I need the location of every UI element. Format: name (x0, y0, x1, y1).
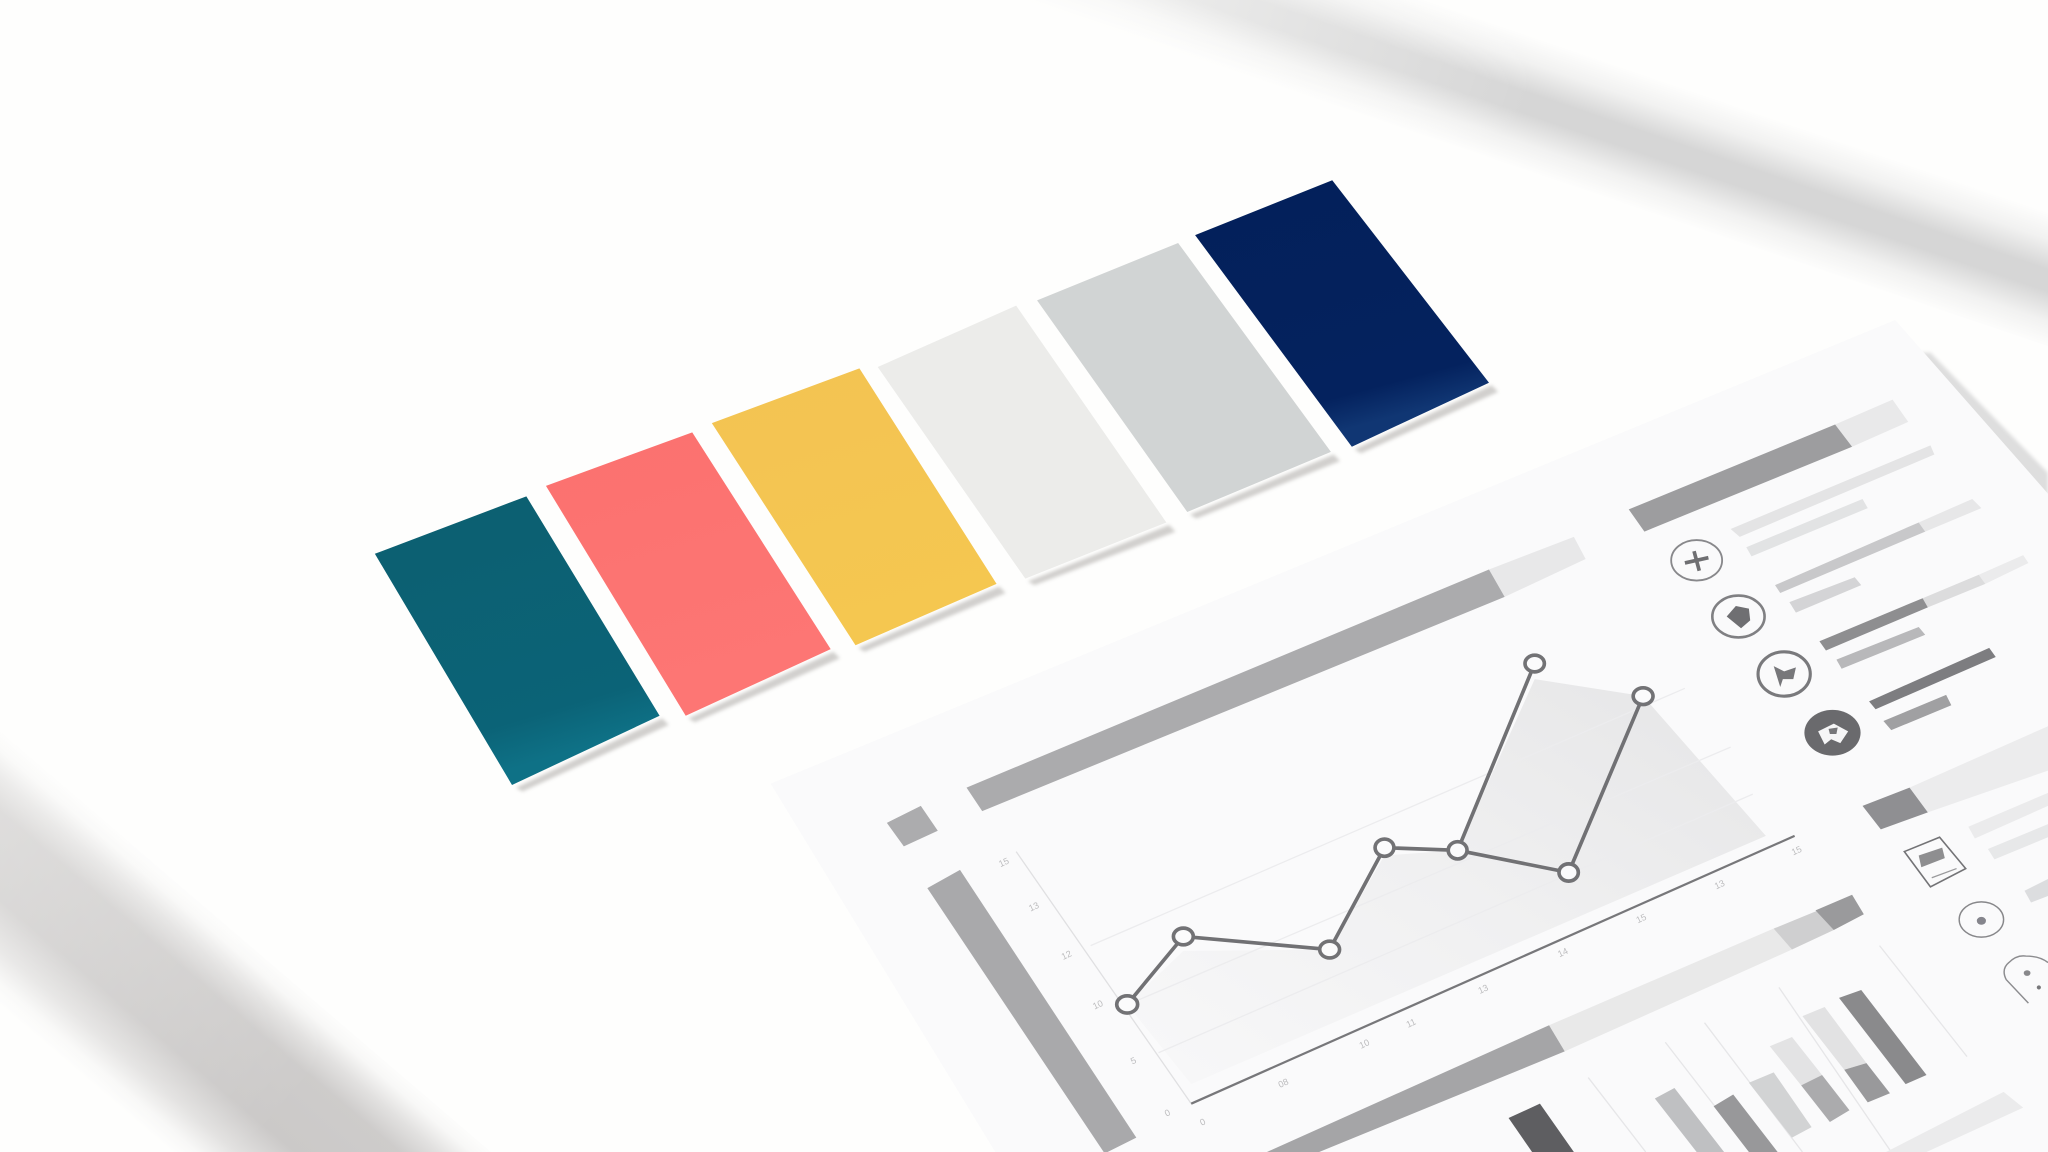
section two text lines (1968, 793, 2048, 903)
legend row 4 bars (1869, 648, 1996, 730)
paint swatches (375, 180, 1498, 792)
x axis labels: 08 (1277, 1076, 1290, 1090)
swatch: navy (1195, 180, 1489, 447)
y axis labels: 10 (1091, 998, 1105, 1011)
y axis labels: 0 (1163, 1107, 1172, 1119)
bar 7 (1839, 990, 1927, 1084)
gridlines (1091, 688, 1753, 1053)
y axis labels: 12 (1060, 948, 1073, 962)
x axis labels: 15 (1634, 912, 1648, 925)
sheet (771, 320, 2048, 1152)
x axis labels: 14 (1556, 946, 1570, 959)
icon: shield badge (1712, 596, 1765, 637)
icon: pill (2004, 956, 2048, 1003)
bar chart gridlines (1588, 946, 1967, 1152)
bar 6 (1802, 1007, 1890, 1102)
legend row 1 bars (1731, 445, 1934, 556)
x axis labels: 10 (1358, 1037, 1371, 1051)
icon: target dot (1959, 902, 2004, 937)
bar 2 (1655, 1088, 1724, 1152)
y axis labels: 5 (1129, 1055, 1138, 1066)
report sheet (771, 320, 2048, 1152)
x axis labels: 0 (1198, 1116, 1207, 1128)
legend heading bar (1629, 400, 1908, 532)
swatch: teal (375, 496, 660, 785)
icon: framed chart (1904, 837, 1966, 887)
y axis labels: 15 (997, 856, 1011, 869)
sheet edge shadow (1920, 353, 2048, 502)
x axis labels (1198, 844, 1803, 1128)
lower right text bar (1886, 1092, 2023, 1152)
swatch shadows (516, 385, 1498, 792)
section two heading bar (1863, 726, 2048, 829)
icon: cross badge (1671, 540, 1722, 581)
x axis labels: 15 (1790, 844, 1803, 857)
chart area fill (1127, 679, 1766, 1084)
y axis labels: 13 (1027, 900, 1041, 913)
window shadow: lower left (0, 731, 491, 1152)
left vertical bar (927, 870, 1136, 1152)
chart heading bar (967, 537, 1586, 811)
icon: filled badge (1804, 710, 1861, 756)
line chart (997, 655, 1803, 1128)
bar 1 (1509, 1104, 1574, 1152)
swatch: light gray (1037, 243, 1331, 512)
bar 3 (1714, 1095, 1778, 1152)
window shadow: upper right (1019, 0, 2048, 346)
swatch: off-white (878, 306, 1166, 579)
lower heading bar (1267, 895, 1864, 1152)
x axis labels: 11 (1405, 1017, 1417, 1030)
x axis labels: 13 (1476, 982, 1490, 996)
bar 5 (1770, 1037, 1849, 1122)
small square marker (887, 806, 938, 846)
legend row 3 bars (1819, 555, 2028, 669)
legend row 2 bars (1775, 499, 1981, 613)
x axis labels: 13 (1713, 878, 1726, 891)
icon: flag badge (1758, 652, 1810, 696)
bar 4 (1749, 1072, 1812, 1138)
y axis labels (997, 856, 1172, 1119)
data line (1127, 664, 1643, 1004)
data points (1117, 655, 1653, 1013)
bar chart (1509, 946, 1967, 1152)
swatch: coral (546, 432, 831, 716)
x axis (1191, 836, 1795, 1104)
y axis (1016, 852, 1191, 1104)
swatch: yellow (712, 368, 997, 645)
